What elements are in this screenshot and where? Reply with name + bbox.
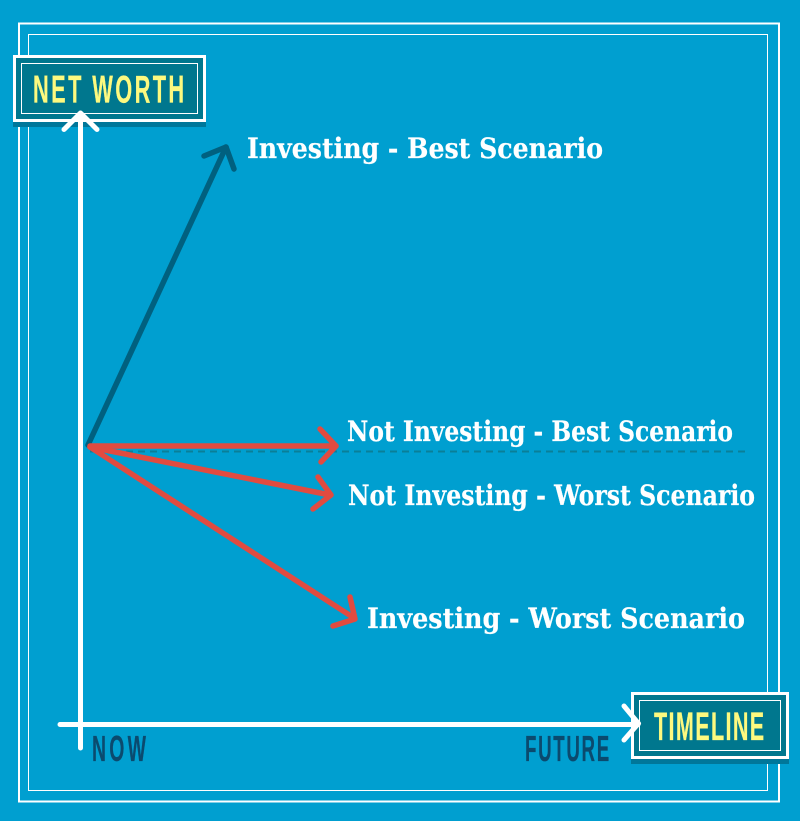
label box: timeline bbox=[631, 694, 789, 764]
axis label: now: NOW bbox=[92, 730, 146, 770]
arrow: investing best scenario bbox=[88, 147, 234, 445]
label: investing best scenario: Investing - Best Scenario bbox=[247, 132, 603, 165]
label box: timeline: TIMELINE bbox=[654, 704, 764, 749]
label: investing worst scenario: Investing - Worst Scenario bbox=[367, 602, 745, 635]
arrow: not investing worst scenario bbox=[90, 447, 331, 509]
label: not investing best scenario: Not Investing - Best Scenario bbox=[347, 415, 733, 448]
arrow: not investing best scenario bbox=[90, 429, 336, 462]
x axis arrow bbox=[60, 706, 638, 740]
axis label: future: FUTURE bbox=[525, 730, 609, 770]
arrow: investing worst scenario bbox=[90, 447, 355, 626]
label box: net worth: NET WORTH bbox=[33, 67, 184, 111]
label box: net worth bbox=[13, 56, 206, 127]
y axis arrow bbox=[64, 113, 97, 748]
